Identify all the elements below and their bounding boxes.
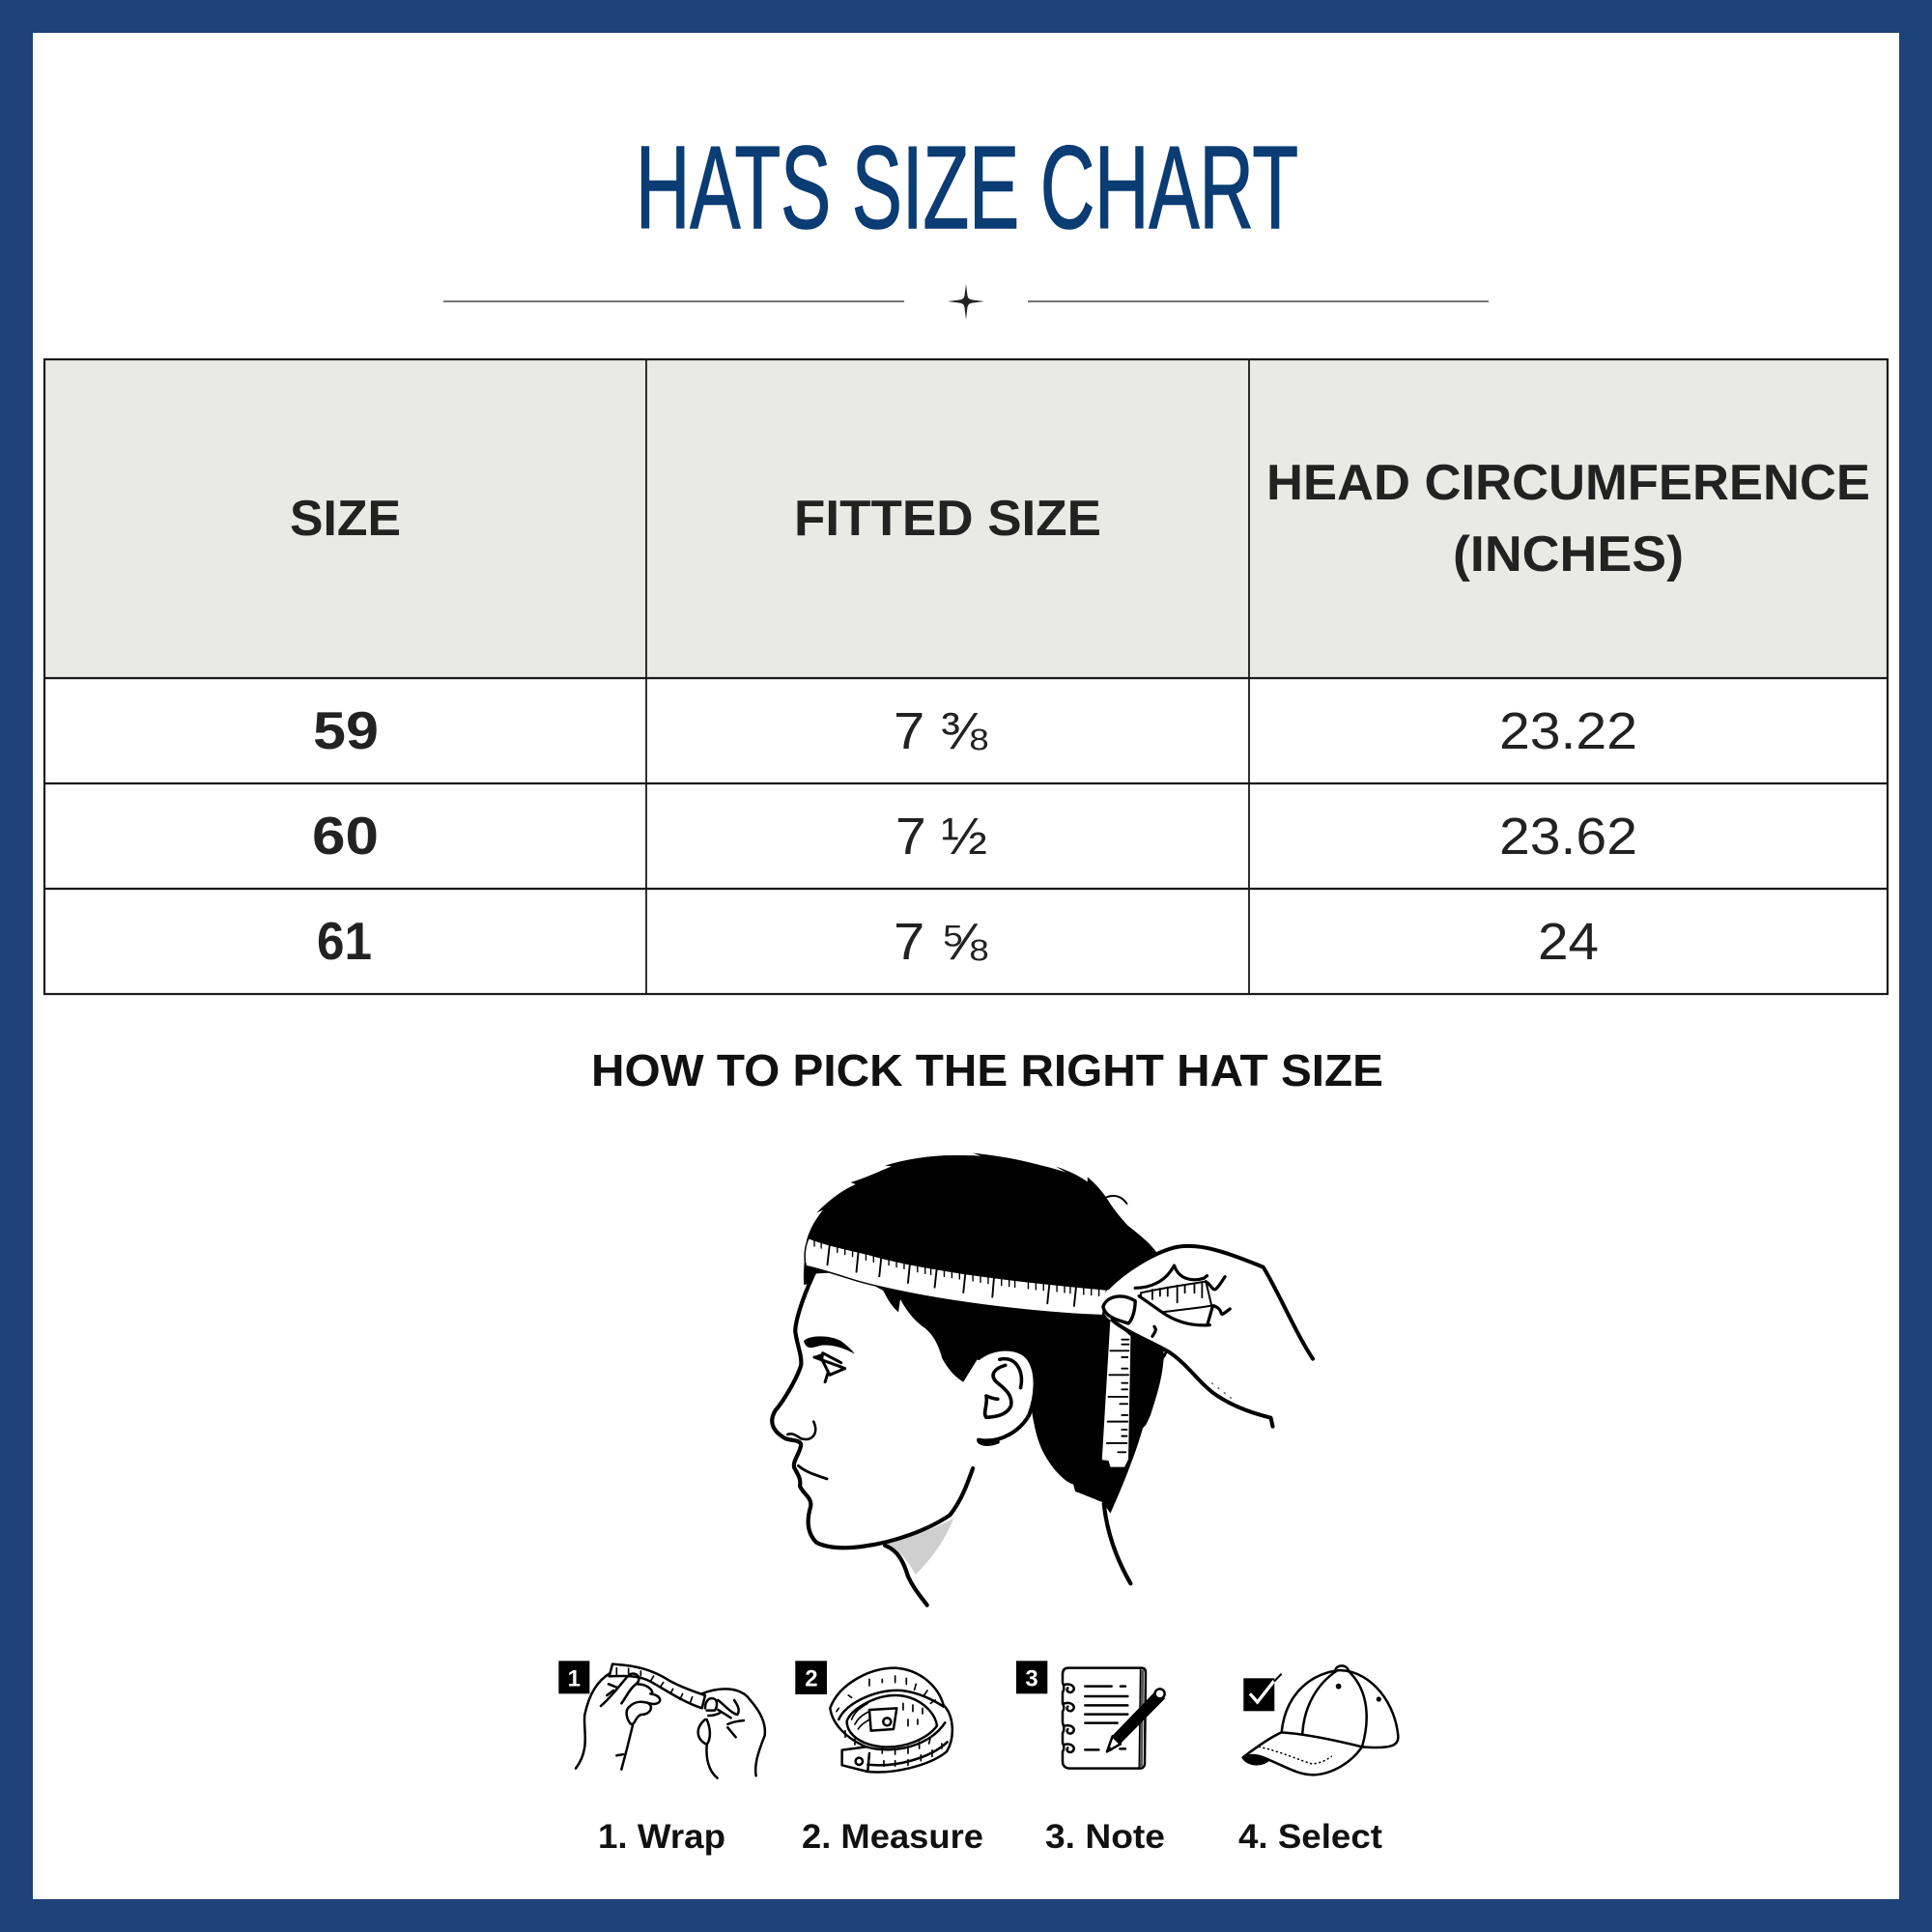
neck front line (885, 1546, 927, 1605)
fingers (1135, 1265, 1230, 1336)
back finger (1145, 1346, 1166, 1361)
row 61: 7 ⅝ (894, 913, 988, 971)
face outline (772, 1277, 973, 1548)
row 60: 23.62 (1499, 808, 1637, 866)
mouth (798, 1465, 827, 1479)
caption: wrap: 1. Wrap (598, 1818, 725, 1856)
divider with star (443, 284, 1489, 320)
step 4 icon: select (1243, 1665, 1398, 1775)
table header background (44, 359, 1888, 678)
hand holding tape (1102, 1245, 1313, 1427)
header: fitted size: FITTED SIZE (794, 491, 1101, 547)
table grid (44, 359, 1888, 994)
row 61: 61 (317, 911, 372, 971)
knuckle dots (1211, 1383, 1235, 1401)
number badge 1: 1 (568, 1665, 581, 1691)
number badge 2: 2 (805, 1665, 818, 1691)
thumb nail (1103, 1296, 1135, 1323)
eye (813, 1352, 845, 1382)
step 3 icon: note (1016, 1661, 1165, 1769)
step captions (598, 1818, 1382, 1856)
row 60 (312, 806, 1637, 866)
caption: select: 4. Select (1238, 1818, 1382, 1856)
eyebrow (804, 1336, 855, 1354)
header: size: SIZE (290, 491, 401, 547)
caption: measure: 2. Measure (802, 1818, 983, 1856)
vertical tape end (1102, 1319, 1130, 1467)
number badge 1 (558, 1661, 589, 1693)
nose wing (787, 1422, 815, 1439)
row 60: 60 (312, 806, 379, 866)
back neck line (1104, 1504, 1130, 1583)
how-to heading: HOW TO PICK THE RIGHT HAT SIZE (591, 1045, 1383, 1095)
baseball cap (1243, 1665, 1398, 1775)
small flyaway hair (1107, 1196, 1126, 1204)
illustration: head being measured (772, 1153, 1313, 1605)
row 59: 23.22 (1499, 702, 1637, 760)
number badge 3 (1016, 1661, 1047, 1693)
neck shadow (885, 1519, 953, 1575)
coiled tape (830, 1668, 952, 1772)
hands and tape (576, 1664, 765, 1778)
step 2 icon: measure (795, 1661, 952, 1772)
size table (44, 359, 1888, 994)
row 59: 7 ⅜ (894, 702, 988, 760)
row 59: 59 (313, 700, 379, 760)
number badge 3: 3 (1025, 1665, 1038, 1691)
measuring tape around head (805, 1238, 1107, 1316)
caption: note: 3. Note (1045, 1818, 1165, 1856)
checkbox badge (1243, 1674, 1282, 1711)
hair sideburn (804, 1268, 816, 1285)
row 61 (317, 911, 1599, 971)
hair (804, 1153, 1164, 1514)
ear (979, 1350, 1036, 1444)
step 1 icon: wrap (558, 1661, 765, 1778)
header: head circumference: (INCHES) (1453, 526, 1684, 582)
title: HATS SIZE CHART (636, 122, 1298, 253)
header: head circumference: HEAD CIRCUMFERENCE (1266, 455, 1870, 511)
notepad and pencil (1063, 1668, 1165, 1769)
row 60: 7 ½ (895, 808, 987, 866)
number badge 2 (795, 1661, 827, 1694)
row 59 (313, 700, 1637, 760)
row 61: 24 (1538, 913, 1599, 971)
tape in fingers (1141, 1282, 1211, 1312)
header: head circumference (1266, 455, 1870, 582)
